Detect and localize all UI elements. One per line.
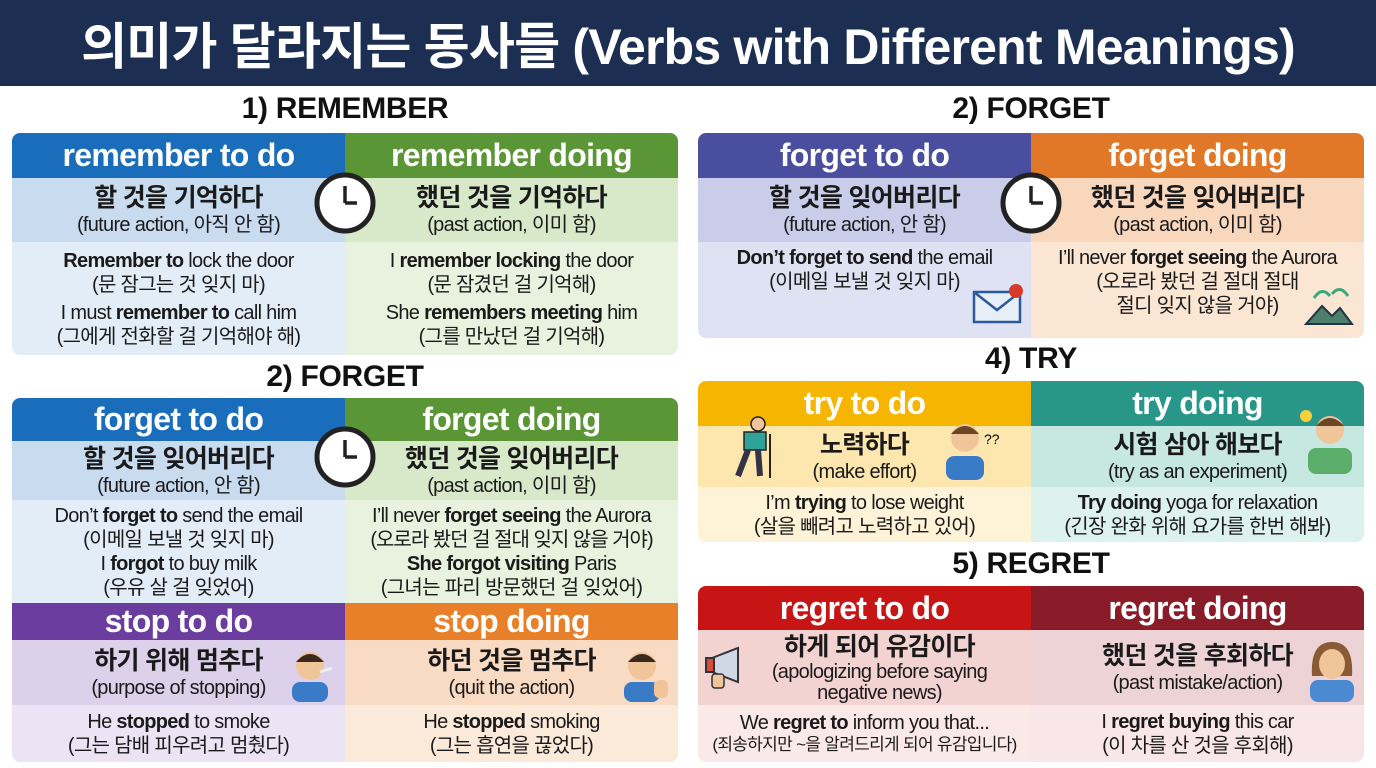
panel: regret: (이 차를 산 것을 후회해) — [1102, 734, 1293, 756]
panel: forget left — [12, 398, 678, 762]
panel: forget left: (past action, 이미 함) — [427, 474, 596, 496]
icon: smoker — [292, 652, 332, 702]
panel: forget right: (future action, 안 함) — [783, 214, 946, 236]
panel: regret: (죄송하지만 ~을 알려드리게 되어 유감입니다) — [712, 735, 1017, 754]
panel: try: (살을 빼려고 노력하고 있어) — [754, 516, 975, 538]
panel: regret: regret doing — [1108, 590, 1287, 626]
panel: try: 시험 삼아 해보다 — [1113, 430, 1282, 458]
panel: forget left: stop doing — [433, 603, 590, 639]
heading: 2) FORGET right: 2) FORGET — [952, 92, 1110, 125]
icon: clock — [314, 172, 376, 234]
title — [0, 0, 1376, 86]
panel: regret: negative news) — [817, 682, 942, 704]
panel: forget left: He stopped to smoke — [87, 710, 270, 732]
panel: forget left: (그녀는 파리 방문했던 걸 잊었어) — [381, 576, 642, 598]
panel: try — [698, 381, 1364, 542]
panel: try: (try as an experiment) — [1108, 460, 1287, 482]
panel: forget right — [698, 133, 1364, 338]
icon: megaphone — [705, 646, 739, 689]
panel: regret: I regret buying this car — [1101, 710, 1294, 732]
icon: sad person — [1310, 642, 1354, 702]
icon: confused person — [946, 424, 1000, 480]
panel: regret — [698, 586, 1364, 762]
panel: remember: She remembers meeting him — [386, 302, 637, 324]
panel: forget left: (그는 담배 피우려고 멈췄다) — [68, 734, 289, 756]
icon: envelope — [972, 284, 1023, 324]
panel: remember: (past action, 이미 함) — [427, 214, 596, 236]
panel: forget left: 하던 것을 멈추다 — [427, 646, 596, 674]
panel: forget left: 할 것을 잊어버리다 — [83, 444, 274, 472]
panel: regret: 하게 되어 유감이다 — [784, 632, 975, 660]
stop headers: stop to do — [105, 603, 252, 639]
panel: try: try to do — [804, 385, 925, 421]
panel: forget left: I’ll never forget seeing the Aurora — [372, 504, 651, 526]
panel: remember: (문 잠겼던 걸 기억해) — [427, 274, 596, 296]
panel: remember: remember doing — [391, 137, 632, 173]
heading: 2) FORGET left: 2) FORGET — [266, 360, 424, 393]
panel: forget right: (past action, 이미 함) — [1113, 214, 1282, 236]
panel: remember: (그에게 전화할 걸 기억해야 해) — [57, 326, 300, 348]
stop headers — [12, 603, 345, 640]
panel: try: Try doing yoga for relaxation — [1078, 492, 1317, 514]
icon: clock — [1000, 172, 1062, 234]
panel: remember: (future action, 아직 안 함) — [77, 214, 280, 236]
heading: 5) REGRET: 5) REGRET — [952, 547, 1110, 580]
panel: remember: 할 것을 기억하다 — [94, 184, 263, 212]
panel: regret: We regret to inform you that... — [740, 712, 989, 734]
panel: remember — [12, 133, 678, 355]
panel: remember: (문 잠그는 것 잊지 마) — [92, 274, 265, 296]
panel: remember: I remember locking the door — [390, 250, 633, 272]
icon: confused person: ?? — [984, 431, 1000, 447]
title: 의미가 달라지는 동사들 (Verbs with Different Meanings) — [81, 19, 1295, 75]
panel: forget left: She forgot visiting Paris — [407, 552, 616, 574]
panel: forget left: I forgot to buy milk — [100, 552, 257, 574]
panel: regret: 했던 것을 후회하다 — [1102, 642, 1293, 670]
panel: forget left: He stopped smoking — [423, 710, 600, 732]
panel: remember: remember to do — [62, 137, 295, 173]
icon: quit smoking — [624, 652, 668, 702]
panel: forget right: (오로라 봤던 걸 절대 절대 — [1096, 271, 1299, 293]
panel: forget left: forget doing — [422, 401, 601, 437]
panel: forget left: (purpose of stopping) — [91, 676, 266, 698]
panel: forget left: 했던 것을 잊어버리다 — [405, 444, 618, 472]
panel: forget left: (future action, 안 함) — [97, 474, 260, 496]
panel: forget left: Don’t forget to send the email — [54, 504, 302, 526]
panel: remember: (그를 만났던 걸 기억해) — [419, 326, 604, 348]
icon: clock — [314, 426, 376, 488]
panel: try: try doing — [1132, 385, 1263, 421]
icon: aurora mountain — [1304, 288, 1354, 325]
panel: forget right: 절디 잊지 않을 거야) — [1116, 295, 1279, 317]
icon: idea person — [1300, 410, 1352, 474]
panel: try: (make effort) — [813, 460, 916, 482]
panel: try: 노력하다 — [820, 430, 909, 458]
panel: forget left: (quit the action) — [449, 676, 574, 698]
heading: 4) TRY: 4) TRY — [985, 342, 1077, 375]
icon: pushing person — [735, 416, 771, 478]
panel: remember: I must remember to call him — [61, 302, 296, 324]
panel: try: (긴장 완화 위해 요가를 한번 해봐) — [1064, 516, 1331, 538]
panel: forget left: 하기 위해 멈추다 — [94, 646, 263, 674]
panel: forget left: (그는 흡연을 끊었다) — [430, 734, 593, 756]
panel: forget right: 했던 것을 잊어버리다 — [1091, 184, 1304, 212]
panel: forget left: (이메일 보낼 것 잊지 마) — [83, 528, 274, 550]
panel: forget right: forget to do — [780, 137, 949, 173]
panel: forget right: (이메일 보낼 것 잊지 마) — [769, 271, 960, 293]
panel: regret: (past mistake/action) — [1113, 672, 1282, 694]
panel: forget right: forget doing — [1108, 137, 1287, 173]
panel: try: I’m trying to lose weight — [765, 492, 964, 514]
heading: 1) REMEMBER: 1) REMEMBER — [242, 92, 448, 125]
panel: forget right: 할 것을 잊어버리다 — [769, 184, 960, 212]
panel: regret: (apologizing before saying — [772, 660, 987, 682]
panel: forget right: Don’t forget to send the email — [737, 247, 992, 269]
panel: forget left: (우유 살 걸 잊었어) — [103, 576, 254, 598]
panel: remember: 했던 것을 기억하다 — [416, 184, 607, 212]
panel: forget left: (오로라 봤던 걸 절대 잊지 않을 거야) — [370, 528, 653, 550]
panel: forget right: I’ll never forget seeing the Aurora — [1058, 247, 1337, 269]
panel: regret: regret to do — [780, 590, 949, 626]
panel: forget left: forget to do — [94, 401, 263, 437]
panel: remember: Remember to lock the door — [63, 250, 294, 272]
